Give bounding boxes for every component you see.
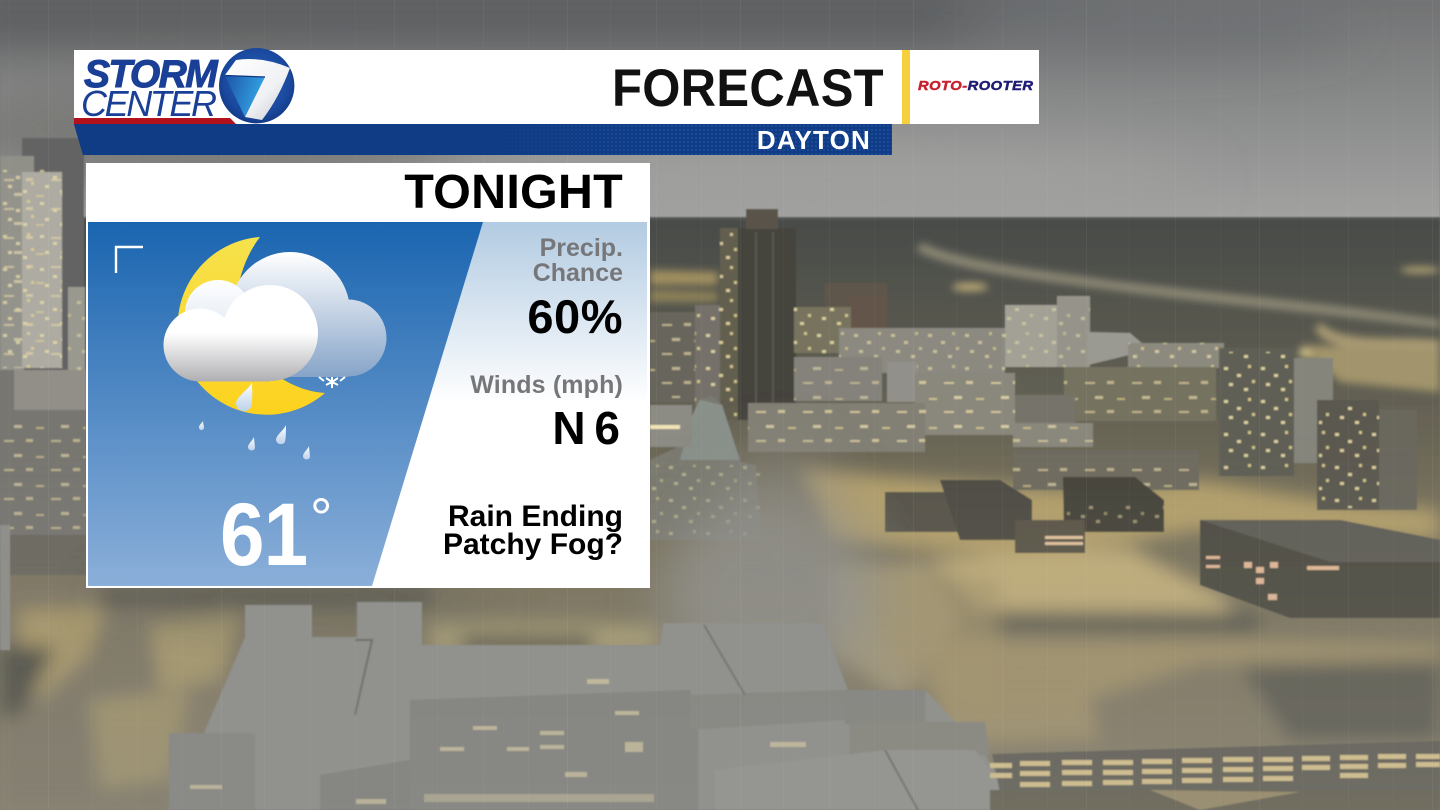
precipitation label: Chance	[533, 258, 623, 286]
left city towers	[0, 138, 86, 650]
precipitation value: 60%	[527, 290, 623, 343]
forecast summary: Rain Ending	[448, 500, 623, 533]
storm center logo text: STORM	[84, 53, 216, 96]
winds label: Winds (mph)	[470, 371, 623, 399]
header banner	[74, 48, 1039, 155]
degree mark: °	[310, 486, 332, 549]
snowflake	[319, 377, 345, 388]
logo disc with 7	[219, 48, 294, 124]
elevated bridge with lit windows	[990, 741, 1440, 810]
winds value: N 6	[552, 402, 620, 454]
city label: DAYTON	[757, 125, 871, 155]
central tall tower	[650, 209, 796, 420]
foreground low buildings	[169, 602, 1020, 810]
right foreground block	[1200, 520, 1440, 618]
white title bar	[74, 50, 1039, 124]
storm center logo text	[81, 53, 219, 124]
forecast summary: Patchy Fog?	[443, 528, 623, 561]
red logo underline	[74, 118, 236, 124]
moon crescent	[178, 237, 325, 415]
rain drops	[199, 382, 310, 459]
back cloud	[230, 252, 386, 377]
storm center logo text: CENTER	[81, 83, 215, 124]
front cloud	[185, 280, 251, 346]
icon: corner bracket	[116, 247, 143, 273]
forecast summary	[443, 500, 623, 561]
temperature: 61	[220, 484, 307, 584]
icon: moon behind clouds with rain	[164, 237, 386, 459]
sponsor logo: ROTO-ROOTER	[918, 78, 1034, 93]
forecast card	[86, 163, 650, 588]
forecast heading: FORECAST	[612, 59, 884, 118]
precipitation label: Precip.	[540, 234, 623, 262]
fog overlays	[100, 445, 880, 680]
yellow divider	[902, 50, 910, 124]
blue location strip	[74, 124, 892, 155]
domed building	[650, 396, 762, 540]
city blocks	[650, 283, 1440, 618]
blue sky panel and right gradient	[88, 222, 647, 586]
precipitation label	[533, 234, 623, 286]
card title: TONIGHT	[404, 165, 623, 219]
ground glow patches	[650, 243, 1440, 392]
